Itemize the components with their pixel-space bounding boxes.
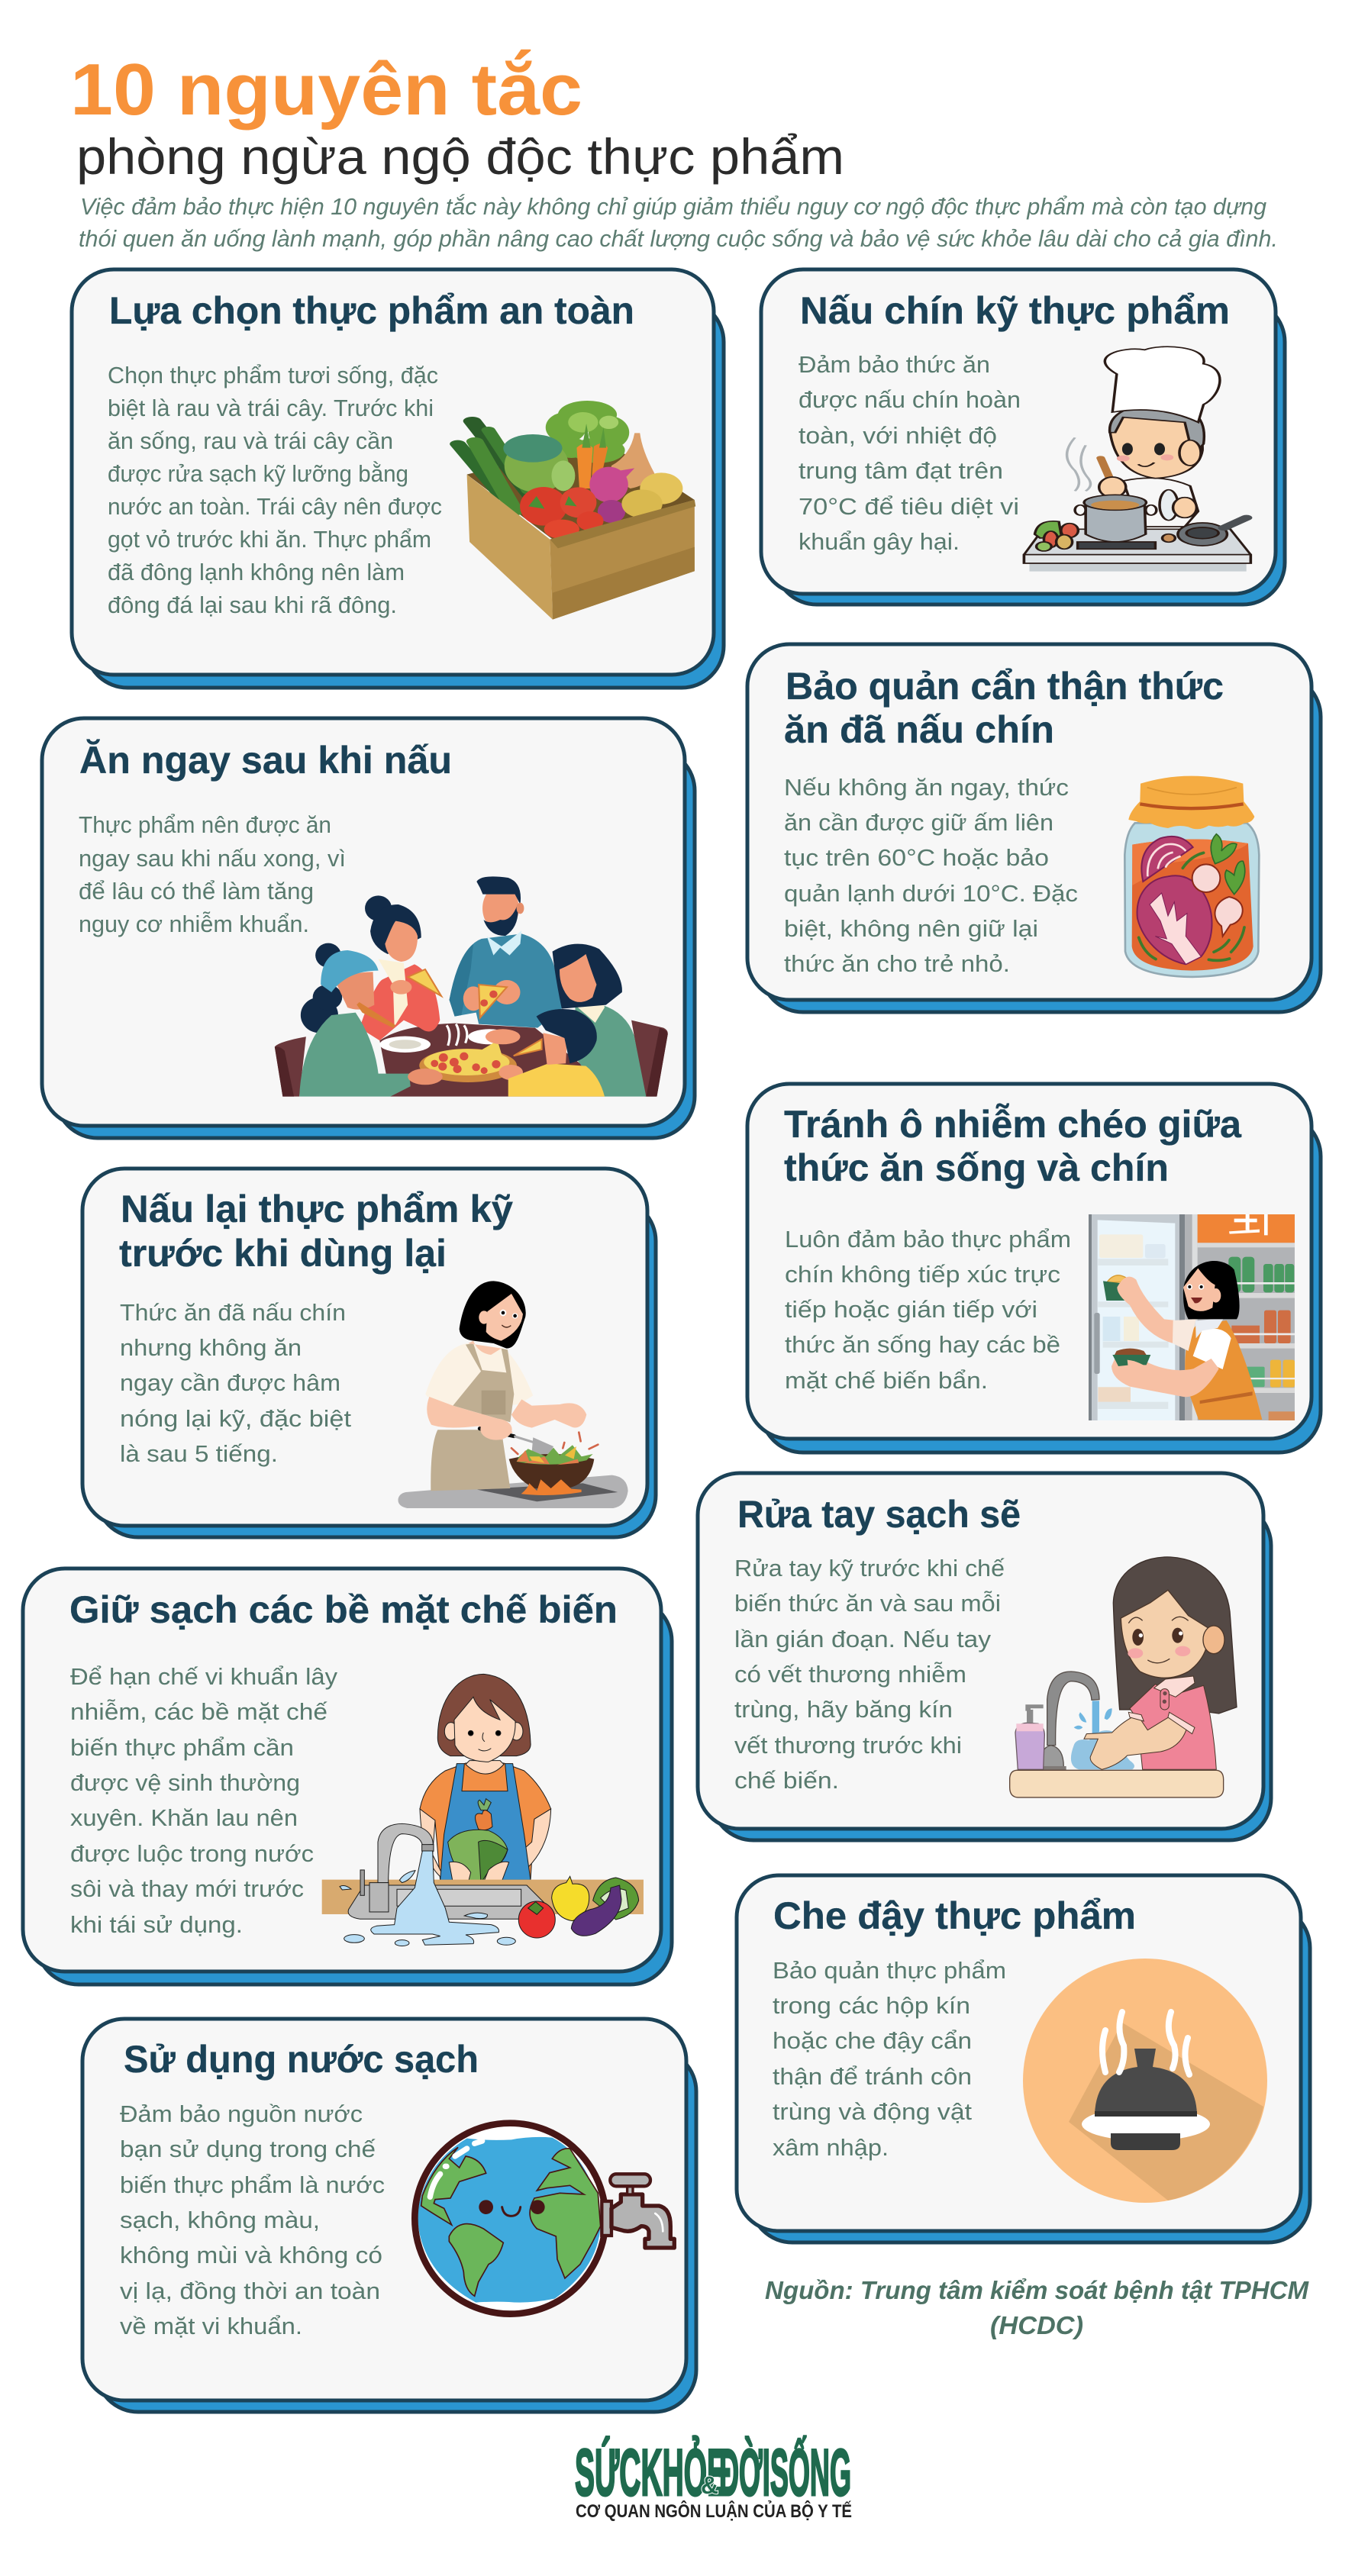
body text: được luộc trong nước bbox=[70, 1840, 314, 1867]
body text: để lâu có thể làm tăng bbox=[79, 878, 314, 904]
pizza and plates bbox=[379, 1024, 523, 1085]
heading: thức ăn sống và chín bbox=[784, 1146, 1169, 1189]
body text: Chọn thực phẩm tươi sống, đặc bbox=[108, 362, 438, 388]
title: 10 nguyên tắc bbox=[70, 49, 582, 131]
body text: vị lạ, đồng thời an toàn bbox=[120, 2278, 380, 2304]
body text: hoặc che đậy cẩn bbox=[773, 2027, 972, 2054]
body text: xâm nhập. bbox=[773, 2134, 889, 2161]
body text: được nấu chín hoàn bbox=[799, 386, 1021, 413]
body text bbox=[120, 1299, 351, 1467]
heading: Nấu chín kỹ thực phẩm bbox=[800, 289, 1230, 332]
panel: Sử dụng nước sạch bbox=[82, 2019, 696, 2412]
heading: Nấu lại thực phẩm kỹ bbox=[121, 1188, 513, 1230]
body text bbox=[773, 1957, 1006, 2161]
heading: Giữ sạch các bề mặt chế biến bbox=[69, 1588, 618, 1631]
body text: nhiễm, các bề mặt chế bbox=[70, 1698, 327, 1725]
source note bbox=[765, 2276, 1310, 2339]
body text bbox=[734, 1555, 1005, 1794]
man bbox=[450, 876, 563, 1028]
body text: bạn sử dụng trong chế bbox=[120, 2136, 376, 2162]
body text: Rửa tay kỹ trước khi chế bbox=[734, 1555, 1005, 1581]
body text: ngay sau khi nấu xong, vì bbox=[79, 845, 346, 872]
body text: thức ăn cho trẻ nhỏ. bbox=[784, 950, 1010, 977]
panel: Tránh ô nhiễm chéo giữa thức ăn sống và chín bbox=[747, 1084, 1321, 1452]
body text: thức ăn sống hay các bề bbox=[785, 1331, 1060, 1358]
body text: Nếu không ăn ngay, thức bbox=[784, 774, 1069, 801]
source note: Nguồn: Trung tâm kiểm soát bệnh tật TPHCM bbox=[765, 2276, 1310, 2304]
heading: Ăn ngay sau khi nấu bbox=[79, 739, 452, 782]
body text: ngay cần được hâm bbox=[120, 1369, 340, 1396]
body text: biến thực phẩm cần bbox=[70, 1734, 294, 1761]
logo: Sức Khỏe & Đời Sống: CƠ QUAN NGÔN LUẬN CỦA BỘ Y TẾ bbox=[576, 2500, 852, 2522]
body text bbox=[120, 2100, 385, 2339]
body text: trùng và động vật bbox=[773, 2098, 972, 2125]
heading: Bảo quản cẩn thận thức bbox=[786, 665, 1224, 708]
heading bbox=[119, 1188, 513, 1275]
body text: biệt, không nên giữ lại bbox=[784, 915, 1038, 942]
icon: chef cooking bbox=[1024, 347, 1250, 572]
heading: Sử dụng nước sạch bbox=[124, 2038, 479, 2081]
body text: mặt chế biến bẩn. bbox=[785, 1367, 988, 1394]
body text: toàn, với nhiệt độ bbox=[799, 422, 997, 449]
intro text bbox=[79, 193, 1278, 252]
logo: Sức Khỏe & Đời Sống: & bbox=[701, 2471, 718, 2499]
body text: ăn sống, rau và trái cây cần bbox=[108, 427, 393, 454]
logo: Sức Khỏe & Đời Sống: SỨCKHỎE bbox=[575, 2436, 727, 2510]
body text: tiếp hoặc gián tiếp với bbox=[785, 1296, 1037, 1323]
body text: nóng lại kỹ, đặc biệt bbox=[120, 1405, 351, 1432]
body text: Bảo quản thực phẩm bbox=[773, 1957, 1006, 1984]
panel: Bảo quản cẩn thận thức ăn đã nấu chín bbox=[747, 644, 1321, 1012]
body text: được rửa sạch kỹ lưỡng bằng bbox=[108, 460, 408, 487]
body text: có vết thương nhiễm bbox=[734, 1661, 966, 1688]
body text: trong các hộp kín bbox=[773, 1992, 970, 2019]
icon: girl washing hands bbox=[1010, 1557, 1237, 1797]
body text: thận để tránh côn bbox=[773, 2063, 972, 2090]
body text: về mặt vi khuẩn. bbox=[120, 2313, 302, 2339]
body text: đã đông lạnh không nên làm bbox=[108, 559, 405, 585]
woman right and boy bbox=[508, 944, 646, 1097]
heading: Lựa chọn thực phẩm an toàn bbox=[109, 289, 634, 332]
body text: khi tái sử dụng. bbox=[70, 1911, 243, 1938]
body text: không mùi và không có bbox=[120, 2242, 382, 2268]
body text bbox=[108, 362, 442, 618]
icon: globe with tap bbox=[415, 2123, 674, 2314]
body text: Luôn đảm bảo thực phẩm bbox=[785, 1226, 1071, 1253]
body text: gọt vỏ trước khi ăn. Thực phẩm bbox=[108, 526, 431, 553]
body text: nước an toàn. Trái cây nên được bbox=[108, 493, 442, 520]
body text: chế biến. bbox=[734, 1767, 839, 1794]
intro text: thói quen ăn uống lành mạnh, góp phần nâng cao chất lượng cuộc sống và bảo vệ sức khỏe lâu dài cho cả gia đình. bbox=[79, 225, 1278, 252]
panel: Che đậy thực phẩm bbox=[737, 1875, 1310, 2242]
icon: woman at fridge bbox=[1089, 1214, 1295, 1420]
body text: đông đá lại sau khi rã đông. bbox=[108, 592, 397, 618]
icon: pickle jar bbox=[1124, 776, 1259, 977]
source note: (HCDC) bbox=[990, 2311, 1083, 2339]
panel: Rửa tay sạch sẽ bbox=[698, 1473, 1271, 1840]
body text bbox=[784, 774, 1078, 977]
body text: Thực phẩm nên được ăn bbox=[79, 811, 331, 838]
body text: sôi và thay mới trước bbox=[70, 1875, 304, 1902]
body text: biến thức ăn và sau mỗi bbox=[734, 1590, 1001, 1617]
body text: ăn cần được giữ ấm liên bbox=[784, 809, 1053, 836]
body text: trùng, hãy băng kín bbox=[734, 1696, 953, 1723]
heading: Tránh ô nhiễm chéo giữa bbox=[784, 1103, 1242, 1146]
body text: nhưng không ăn bbox=[120, 1334, 302, 1361]
body text bbox=[70, 1663, 338, 1938]
body text bbox=[785, 1226, 1071, 1394]
intro text: Việc đảm bảo thực hiện 10 nguyên tắc này không chỉ giúp giảm thiểu nguy cơ ngộ độc thực phẩm mà còn tạo dựng bbox=[80, 193, 1266, 220]
body text: lần gián đoạn. Nếu tay bbox=[734, 1626, 992, 1652]
heading: trước khi dùng lại bbox=[119, 1232, 447, 1275]
body text: Để hạn chế vi khuẩn lây bbox=[70, 1663, 338, 1690]
body text: được vệ sinh thường bbox=[70, 1769, 300, 1796]
body text bbox=[79, 811, 346, 937]
icon: food cloche bbox=[1023, 1959, 1267, 2203]
body text: quản lạnh dưới 10°C. Đặc bbox=[784, 880, 1078, 907]
body text: là sau 5 tiếng. bbox=[120, 1440, 278, 1467]
body text: xuyên. Khăn lau nên bbox=[70, 1804, 298, 1831]
panel: Lựa chọn thực phẩm an toàn bbox=[72, 269, 724, 688]
body text bbox=[799, 351, 1021, 555]
body text: sạch, không màu, bbox=[120, 2207, 320, 2233]
heading bbox=[784, 1103, 1242, 1189]
panel: Nấu chín kỹ thực phẩm bbox=[761, 269, 1285, 605]
heading: Rửa tay sạch sẽ bbox=[737, 1493, 1021, 1536]
body text: chín không tiếp xúc trực bbox=[785, 1261, 1060, 1288]
body text: nguy cơ nhiễm khuẩn. bbox=[79, 911, 309, 937]
body text: 70°C để tiêu diệt vi bbox=[799, 493, 1019, 520]
body text: khuẩn gây hại. bbox=[799, 528, 960, 555]
body text: Thức ăn đã nấu chín bbox=[120, 1299, 346, 1326]
icon: woman cooking wok bbox=[398, 1281, 628, 1508]
body text: biến thực phẩm là nước bbox=[120, 2171, 385, 2198]
subtitle: phòng ngừa ngộ độc thực phẩm bbox=[76, 128, 844, 185]
heading: ăn đã nấu chín bbox=[784, 708, 1054, 751]
heading bbox=[784, 665, 1224, 751]
panel: Giữ sạch các bề mặt chế biến bbox=[23, 1568, 672, 1984]
body text: Đảm bảo nguồn nước bbox=[120, 2100, 363, 2127]
panel: Nấu lại thực phẩm kỹ trước khi dùng lại bbox=[82, 1169, 656, 1537]
panel: Ăn ngay sau khi nấu bbox=[42, 718, 695, 1138]
heading: Che đậy thực phẩm bbox=[773, 1894, 1136, 1937]
body text: biệt là rau và trái cây. Trước khi bbox=[108, 395, 434, 421]
icon: woman washing vegetables bbox=[322, 1674, 644, 1946]
body text: tục trên 60°C hoặc bảo bbox=[784, 844, 1049, 871]
text: ĐỜISỐNG bbox=[719, 2436, 851, 2510]
girl with hat bbox=[299, 943, 411, 1097]
body text: trung tâm đạt trên bbox=[799, 457, 1003, 484]
icon: family eating pizza bbox=[275, 876, 668, 1097]
body text: vết thương trước khi bbox=[734, 1732, 962, 1759]
body text: Đảm bảo thức ăn bbox=[799, 351, 990, 378]
icon: vegetable box bbox=[458, 401, 695, 620]
woman with bun bbox=[360, 895, 441, 1040]
